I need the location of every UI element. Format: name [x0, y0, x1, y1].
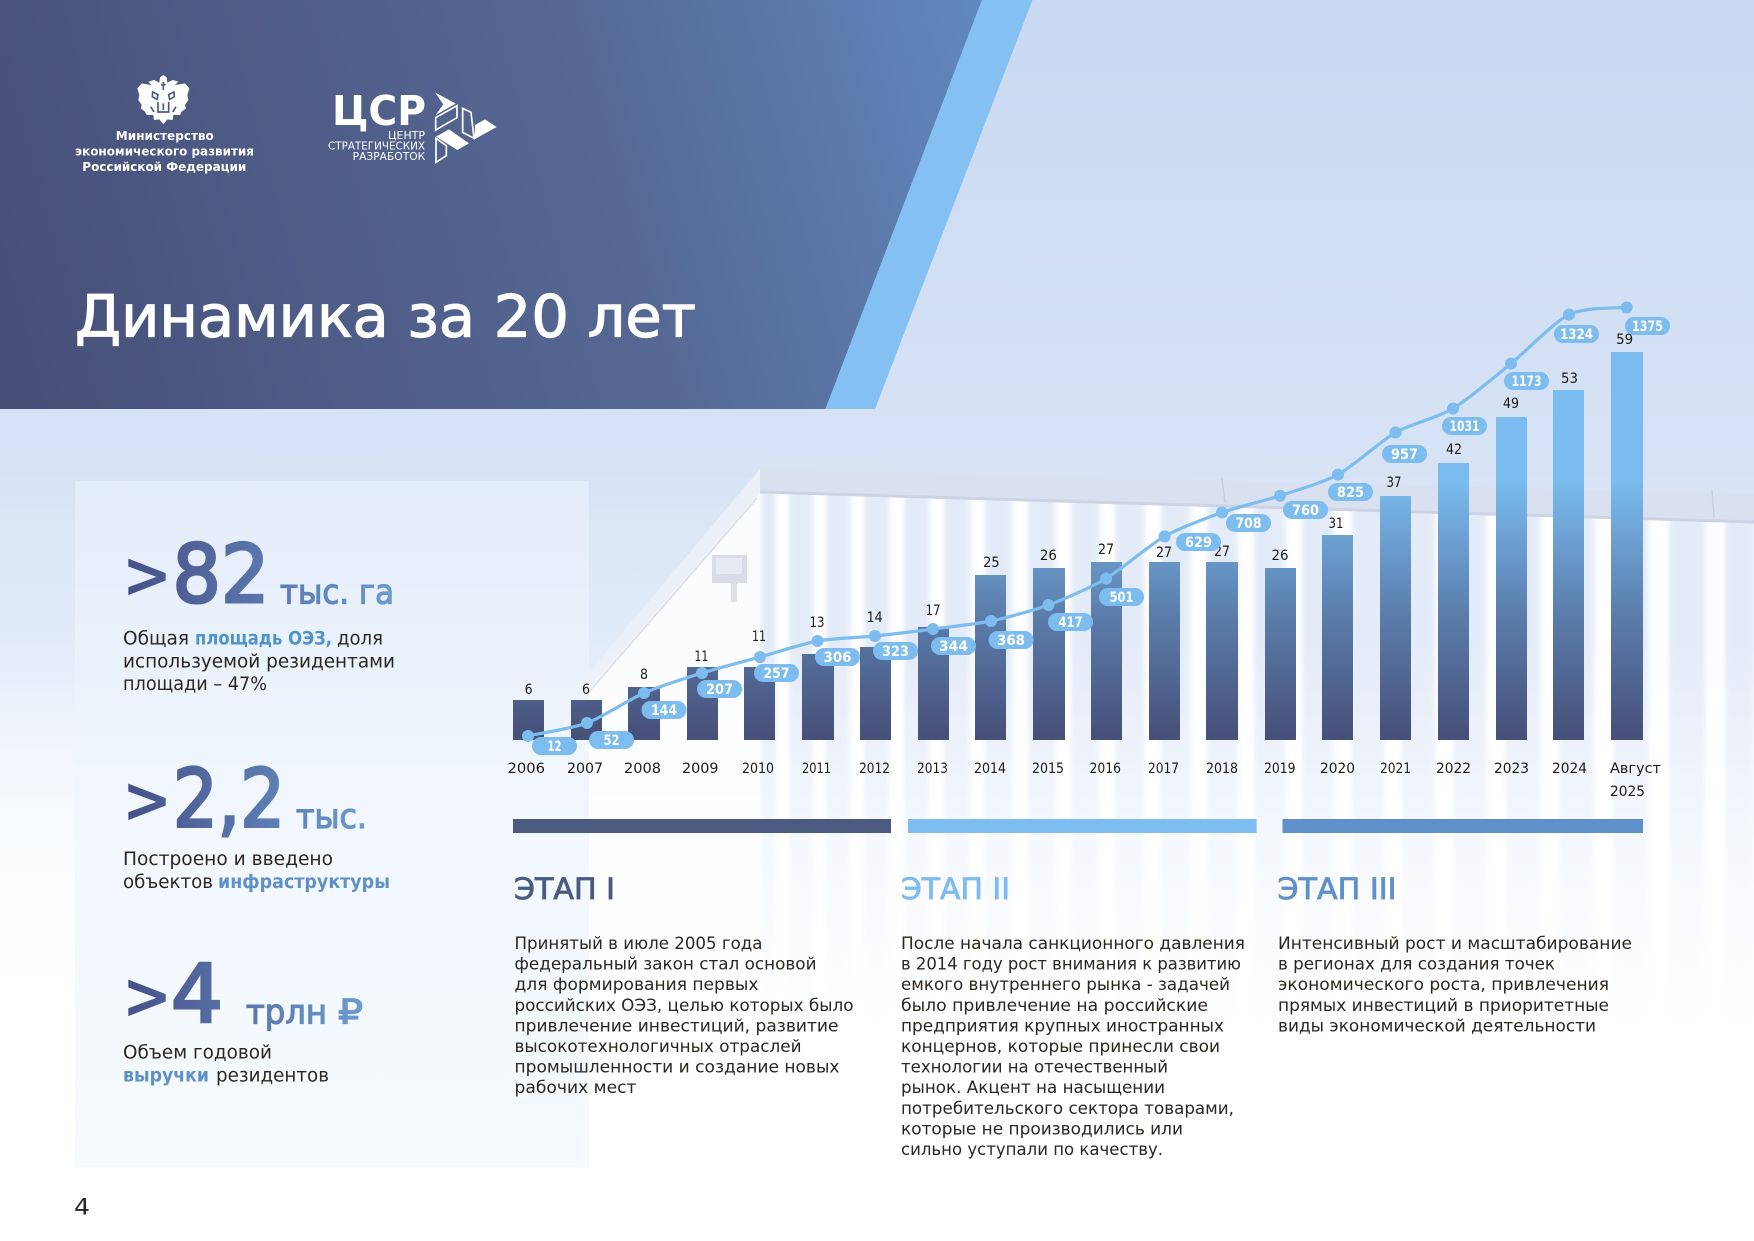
bar value labels: 14: [867, 610, 883, 626]
bar value labels: [525, 332, 1633, 698]
panel: stage I: рабочих мест: [514, 1078, 637, 1097]
year axis labels: 2014: [974, 761, 1006, 777]
line value pills: 52: [604, 733, 620, 749]
panel: stage III: виды экономической деятельности: [1278, 1016, 1596, 1035]
bar value labels: 8: [640, 667, 648, 683]
stat: infrastructure: объектов: [123, 872, 213, 893]
line value pills: 12: [548, 739, 562, 755]
stat: area: Общая: [123, 628, 189, 650]
year axis labels: 2007: [567, 761, 603, 777]
line value pills: 1173: [1512, 374, 1542, 390]
logo: Ministry of Economic Development: Российской Федерации: [82, 159, 246, 174]
year axis labels: 2009: [682, 761, 718, 777]
line value pills: 957: [1391, 447, 1418, 463]
line value pills: 1031: [1450, 419, 1480, 435]
panel: stage I: для формирования первых: [514, 975, 759, 994]
logo: CSR: РАЗРАБОТОК: [353, 151, 426, 163]
bar value labels: 26: [1040, 548, 1057, 564]
stat: area: >: [122, 539, 172, 613]
panel: stage II: которые не производились или: [901, 1119, 1183, 1138]
bar value labels: 11: [694, 649, 708, 665]
line value pills: 344: [939, 639, 968, 655]
stat: revenue: резидентов: [216, 1066, 329, 1086]
bar value labels: 26: [1272, 548, 1288, 564]
year axis labels: 2023: [1494, 761, 1529, 777]
panel: stage II: концернов, которые принесли свои: [901, 1037, 1220, 1056]
year axis labels: 2010: [742, 761, 774, 777]
bar value labels: 6: [582, 682, 590, 698]
panel: stage II: ЭТАП II: [901, 872, 1010, 906]
stat: area: площадь ОЭЗ,: [195, 628, 332, 650]
stat: revenue: Объем годовой: [123, 1042, 272, 1064]
panel: stage III: в регионах для создания точек: [1278, 955, 1555, 974]
stat: infrastructure: тыс.: [296, 797, 367, 837]
panel: stage II: сильно уступали по качеству.: [901, 1140, 1163, 1159]
line value pills: 629: [1185, 535, 1212, 551]
stat: infrastructure: 2,2: [173, 752, 285, 846]
stat: area: используемой резидентами: [123, 652, 395, 672]
line value pills: 417: [1058, 615, 1082, 631]
stat: area: доля: [337, 628, 383, 650]
bar value labels: 13: [810, 615, 824, 631]
stat: revenue: выручки: [123, 1066, 209, 1086]
line value pills: 323: [882, 644, 909, 660]
year axis labels: 2019: [1264, 761, 1296, 777]
line value pills: 501: [1110, 590, 1134, 606]
title: Динамика за 20 лет: [75, 282, 696, 350]
stat: area: тыс. га: [280, 572, 394, 612]
logo: CSR: ЦСР: [332, 87, 426, 135]
bars: [513, 352, 1643, 740]
stat: infrastructure: инфраструктуры: [218, 872, 390, 893]
stat: area: площади – 47%: [123, 674, 267, 695]
bar value labels: 31: [1328, 516, 1344, 532]
panel: stage II: рынок. Акцент на насыщении: [901, 1078, 1165, 1097]
year axis labels: 2016: [1090, 761, 1121, 777]
year axis labels: 2013: [917, 761, 948, 777]
year axis labels: 2022: [1436, 761, 1471, 777]
year axis labels: Август: [1610, 761, 1662, 777]
year axis labels: 2021: [1380, 761, 1411, 777]
logo: CSR: [328, 87, 497, 163]
year axis labels: 2008: [624, 761, 661, 777]
line value pills: 1324: [1560, 327, 1593, 343]
stat: revenue: [122, 948, 363, 1086]
year axis labels: 2017: [1148, 761, 1179, 777]
year axis labels: 2012: [859, 761, 890, 777]
bar value labels: 6: [525, 682, 533, 698]
stat: area: [122, 528, 395, 695]
icon: double-headed eagle emblem: [137, 75, 189, 124]
panel: stage II: емкого внутреннего рынка - задачей: [901, 975, 1230, 994]
stat: revenue: трлн: [246, 992, 327, 1032]
chart: residents bars and cumulative line: [508, 302, 1670, 800]
stat: infrastructure: [122, 752, 390, 893]
bar value labels: 11: [752, 629, 766, 645]
logo: Ministry of Economic Development: экономического развития: [75, 144, 254, 158]
panel: stage I: Принятый в июле 2005 года: [514, 934, 762, 953]
line value pills: 257: [764, 666, 790, 682]
bar value labels: 27: [1098, 542, 1114, 558]
year axis labels: 2025: [1610, 784, 1645, 800]
stat: revenue: 4: [171, 948, 223, 1041]
year axis labels: 2024: [1552, 761, 1587, 777]
bar value labels: 25: [983, 555, 1000, 571]
header banner: [0, 0, 1032, 409]
stat: revenue: ₽: [338, 992, 363, 1032]
icon: CSR arrows mark: [435, 92, 497, 162]
panel: stage III: Интенсивный рост и масштабирование: [1278, 934, 1632, 953]
stat: infrastructure: >: [122, 764, 172, 838]
panel: stage II: в 2014 году рост внимания к развитию: [901, 955, 1241, 974]
year axis labels: 2018: [1206, 761, 1238, 777]
stat: infrastructure: Построено и введено: [123, 849, 333, 870]
panel: stage II: После начала санкционного давления: [901, 934, 1245, 953]
line value pills: 144: [651, 703, 677, 719]
panel: stage II: технологии на отечественный: [901, 1058, 1168, 1077]
panel: stage I: ЭТАП I: [514, 872, 615, 906]
logo: Ministry of Economic Development: Министерство: [116, 128, 214, 143]
line value pills: [532, 317, 1670, 755]
logo: CSR: ЦЕНТР: [388, 130, 425, 142]
bar value labels: 42: [1446, 442, 1462, 458]
bar value labels: 27: [1156, 545, 1172, 561]
line value pills: 306: [824, 650, 852, 666]
panel: stage I: промышленности и создание новых: [514, 1058, 840, 1077]
page number: 4: [74, 1196, 90, 1220]
bar value labels: 27: [1214, 544, 1230, 560]
line value pills: 708: [1236, 516, 1262, 532]
bar value labels: 49: [1503, 396, 1519, 412]
panel: stage II: [901, 819, 1257, 1159]
panel: stage I: федеральный закон стал основой: [514, 955, 816, 974]
logo: CSR: СТРАТЕГИЧЕСКИХ: [328, 140, 425, 152]
logo: Ministry of Economic Development: [75, 75, 254, 174]
stat: revenue: >: [122, 960, 172, 1034]
year axis labels: 2011: [802, 761, 831, 777]
bar value labels: 53: [1561, 371, 1578, 387]
panel: stage I: привлечение инвестиций, развитие: [514, 1016, 838, 1035]
stat: area: 82: [172, 528, 270, 621]
bar value labels: 37: [1386, 475, 1402, 491]
panel: stage I: [513, 819, 891, 1097]
line value pills: 207: [706, 682, 733, 698]
line value pills: 825: [1337, 485, 1364, 501]
year axis labels: 2006: [508, 761, 545, 777]
year axis labels: [508, 761, 1662, 800]
bar value labels: 59: [1616, 332, 1633, 348]
panel: key statistics: [75, 481, 589, 1167]
year axis labels: 2020: [1320, 761, 1355, 777]
year axis labels: 2015: [1032, 761, 1064, 777]
panel: stage II: было привлечение на российские: [901, 996, 1208, 1015]
line value pills: 368: [997, 633, 1025, 649]
panel: stage III: экономического роста, привлечения: [1278, 975, 1609, 994]
bar value labels: 17: [926, 603, 940, 619]
panel: stage III: ЭТАП III: [1278, 872, 1396, 906]
panel: stage I: высокотехнологичных отраслей: [514, 1037, 802, 1056]
panel: stage III: [1278, 819, 1643, 1035]
panel: stage III: прямых инвестиций в приоритетные: [1278, 996, 1609, 1015]
panel: stage II: потребительского сектора товарами,: [901, 1099, 1234, 1118]
line value pills: 1375: [1632, 319, 1663, 335]
line value pills: 760: [1292, 503, 1319, 519]
trend line with markers: [522, 302, 1633, 742]
panel: stage I: российских ОЭЗ, целью которых было: [514, 996, 854, 1015]
panel: stage II: предприятия крупных иностранных: [901, 1016, 1224, 1035]
